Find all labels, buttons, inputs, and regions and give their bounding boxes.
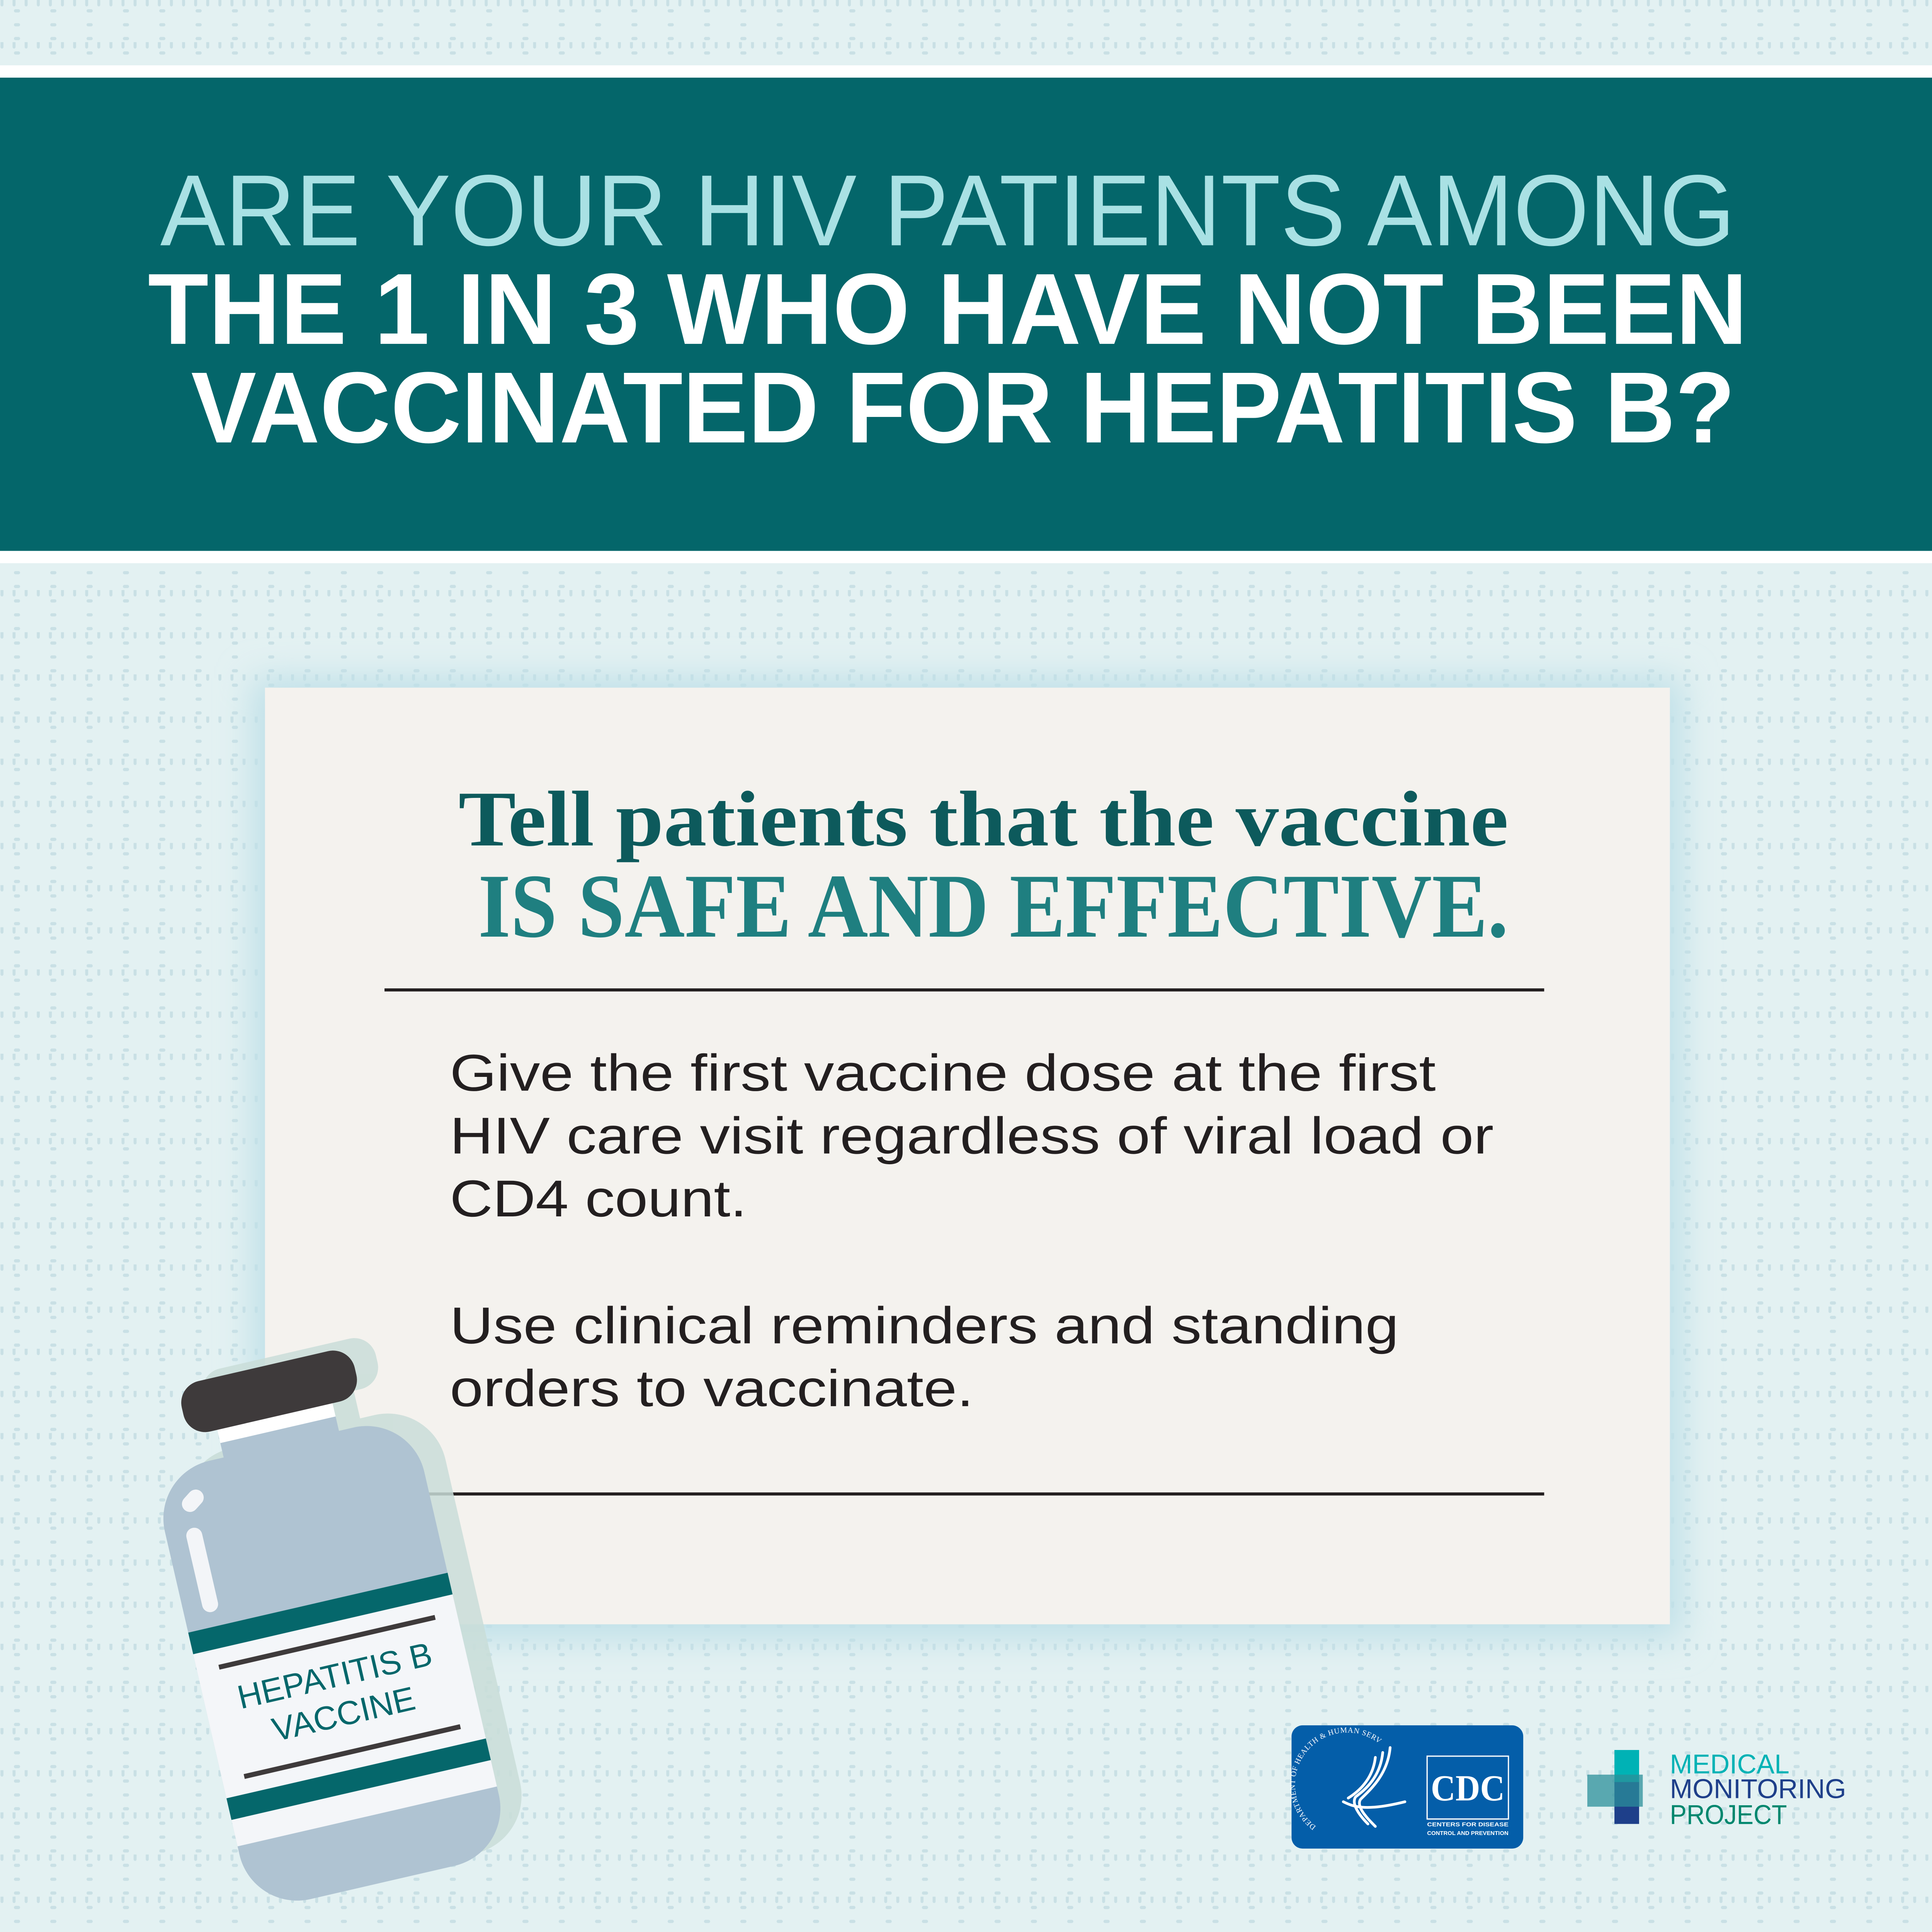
logo: Medical Monitoring Project (1587, 1749, 1846, 1830)
logo: Medical Monitoring Project: MONITORING (1670, 1773, 1846, 1804)
logo: HHS CDC: CONTROL AND PREVENTION (1427, 1830, 1509, 1837)
vial label text (234, 1635, 444, 1755)
body text: Give the first vaccine dose at the first (450, 1044, 1436, 1102)
card (253, 678, 1682, 1639)
logo: Medical Monitoring Project: MEDICAL (1670, 1749, 1789, 1779)
logo: Medical Monitoring Project: PROJECT (1670, 1799, 1787, 1830)
title: VACCINATED FOR HEPATITIS B? (191, 351, 1735, 464)
header banner (0, 78, 1932, 551)
vial label text: HEPATITIS B (234, 1635, 435, 1716)
logo: HHS CDC: CENTERS FOR DISEASE (1427, 1822, 1509, 1828)
logo: HHS CDC: CDC (1431, 1768, 1505, 1809)
card heading: IS SAFE AND EFFECTIVE. (478, 856, 1509, 957)
logo: HHS CDC: DEPARTMENT OF HEALTH & HUMAN SERVICES·USA (0, 0, 1383, 1832)
body text: HIV care visit regardless of viral load or (450, 1107, 1494, 1165)
title (148, 154, 1748, 464)
body text: orders to vaccinate. (450, 1360, 974, 1417)
body text: Use clinical reminders and standing (450, 1297, 1399, 1354)
body text (450, 1044, 1494, 1417)
vial label text: VACCINE (269, 1680, 419, 1749)
title: THE 1 IN 3 WHO HAVE NOT BEEN (148, 253, 1748, 366)
icon: vaccine vial (132, 1324, 535, 1912)
title: ARE YOUR HIV PATIENTS AMONG (160, 154, 1735, 267)
body text: CD4 count. (450, 1170, 747, 1228)
card heading (458, 776, 1509, 957)
card heading: Tell patients that the vaccine (458, 776, 1509, 863)
